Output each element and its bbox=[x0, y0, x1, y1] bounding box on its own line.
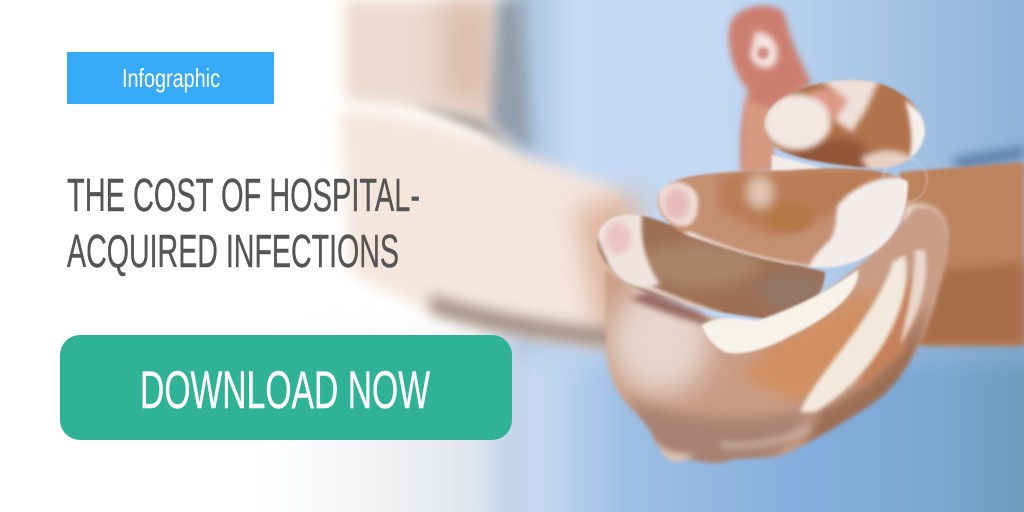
back thumb bbox=[729, 6, 812, 172]
shadow under lower finger bbox=[630, 292, 715, 326]
middle finger bbox=[656, 166, 910, 268]
title: THE COST OF HOSPITAL- bbox=[67, 169, 420, 221]
button: download now: DOWNLOAD NOW bbox=[140, 361, 430, 420]
forearm bbox=[340, 112, 640, 346]
upper arm bbox=[345, 0, 505, 130]
foam streak on palm edge bbox=[800, 255, 906, 412]
tag: Infographic bbox=[67, 52, 274, 104]
button: download now bbox=[60, 335, 512, 440]
tag: Infographic: Infographic bbox=[122, 63, 220, 93]
background photo: white fade, blue scrubs and arms bbox=[333, 0, 1024, 512]
lower finger bbox=[596, 214, 826, 320]
main foam streak bbox=[702, 270, 858, 353]
palm and lower hand bbox=[604, 206, 947, 466]
right-hand fingertips bbox=[880, 204, 947, 360]
right forearm bbox=[900, 162, 1024, 345]
title bbox=[67, 169, 420, 277]
photo: soapy hands bbox=[590, 6, 960, 480]
foam between fingers bbox=[772, 155, 830, 174]
bubble bbox=[883, 158, 927, 202]
top finger bbox=[763, 78, 926, 170]
title: ACQUIRED INFECTIONS bbox=[67, 225, 399, 277]
